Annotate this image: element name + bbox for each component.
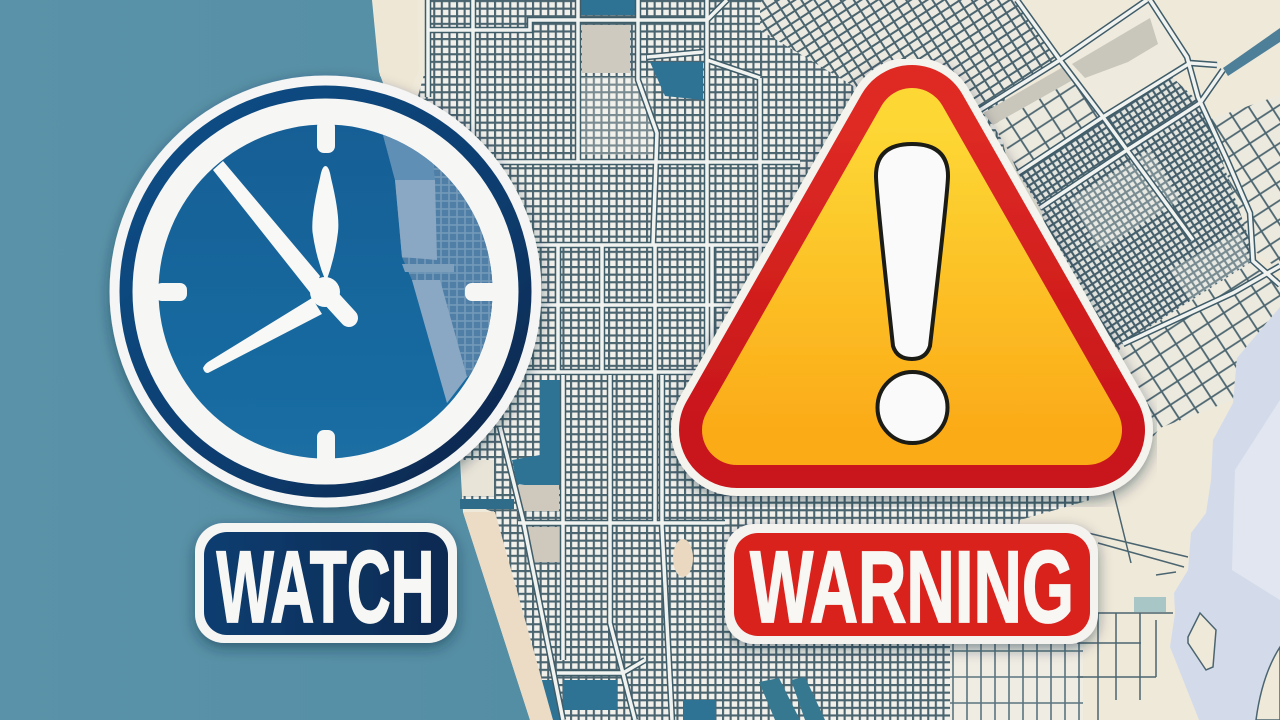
triangle red band	[737, 123, 1087, 430]
map: white arterial roads	[428, 0, 1280, 720]
warning pill border	[725, 524, 1098, 644]
label: WARNING	[725, 524, 1098, 644]
map: city street grid	[372, 0, 1280, 720]
minute hand	[213, 161, 320, 295]
map: river and bay	[1170, 307, 1280, 720]
map: arterial road casings	[428, 0, 1280, 720]
hour hand	[203, 298, 322, 373]
map: dense block south of avenues	[1040, 103, 1253, 395]
clock face	[158, 124, 492, 458]
watch text: WATCH	[216, 530, 434, 644]
map: south east sparse streets	[950, 490, 1188, 720]
map: sparse blocks east of avenue	[1208, 95, 1280, 270]
clock hands	[203, 161, 349, 373]
clock outer white ring	[110, 76, 542, 508]
triangle white border	[737, 123, 1087, 430]
map: dense central street grid	[418, 0, 1090, 720]
map: channel to north east	[1223, 28, 1280, 76]
icon: warning triangle	[737, 123, 1087, 443]
map: north diagonal medium grid	[760, 0, 1060, 130]
clock tick marks	[155, 120, 500, 466]
map: northern beach	[373, 0, 419, 92]
exclamation dot	[878, 372, 948, 443]
map: light channel	[1232, 400, 1280, 600]
clock face map inset	[383, 135, 500, 403]
second leaf hand	[312, 166, 338, 282]
label: WATCH	[195, 523, 457, 644]
hub and tail	[310, 277, 340, 307]
map: grey park strips	[983, 18, 1158, 125]
map: river islands	[1188, 613, 1280, 720]
clock dark blue ring	[120, 86, 532, 498]
map: pale patch within dense block	[1070, 150, 1250, 300]
triangle yellow fill	[737, 123, 1087, 430]
icon: alarm clock watch symbol	[110, 76, 542, 508]
map: sparse blocks north of river	[1088, 261, 1280, 480]
warning text: WARNING	[750, 530, 1074, 644]
watch pill fill	[204, 532, 448, 635]
map: dense blocks between avenues	[1018, 75, 1200, 208]
exclamation bar	[876, 144, 948, 359]
map: sparse block west of crossing	[993, 80, 1103, 173]
watch pill border	[195, 523, 457, 643]
map: land base	[372, 0, 1280, 720]
warning pill fill	[734, 533, 1090, 636]
exclamation mark	[876, 144, 948, 443]
map: northern sparse blocks	[1060, 0, 1195, 117]
map: parks and water blocks	[460, 0, 825, 720]
map: beach strip	[463, 512, 553, 720]
clock inner white ring	[132, 98, 518, 484]
